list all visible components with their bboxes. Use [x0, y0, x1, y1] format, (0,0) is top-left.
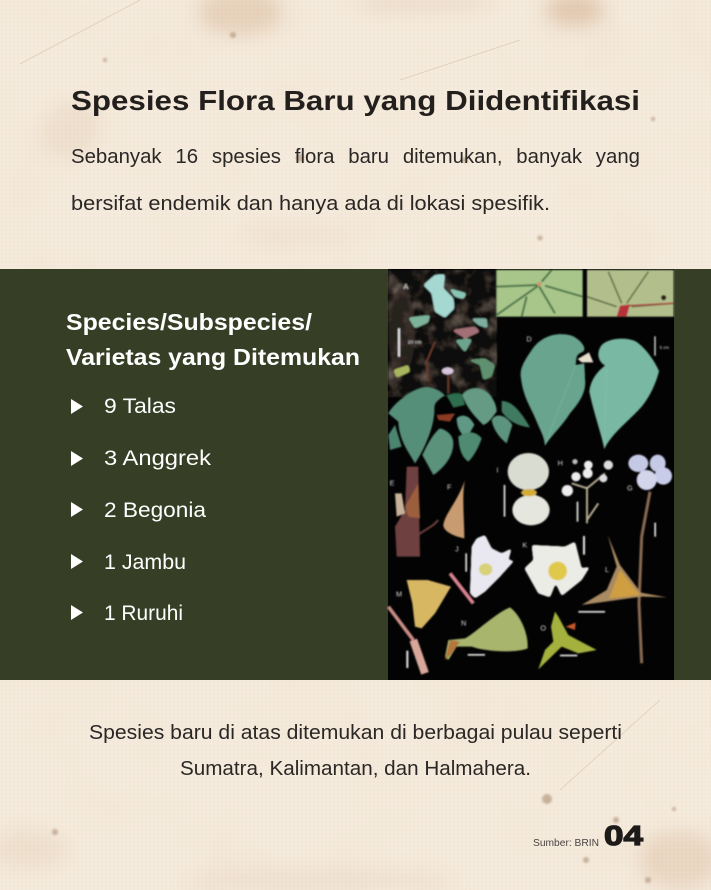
buds H: [562, 459, 613, 523]
list item: Talas: [71, 395, 176, 418]
label letters: G: [627, 484, 633, 493]
label letters: L: [605, 565, 609, 574]
label letters: O: [540, 624, 546, 633]
inflorescence G: [628, 455, 672, 663]
closing note: [89, 722, 622, 780]
fruit N: [445, 607, 528, 660]
title: Spesies Flora Baru yang Diidentifikasi: [71, 85, 640, 116]
source credit: Sumber: BRIN: [533, 837, 599, 849]
label letters: H: [558, 459, 563, 468]
flower J: [450, 535, 514, 603]
list item: Ruruhi: 1 Ruruhi: [104, 602, 183, 625]
list item: Anggrek: 3 Anggrek: [104, 447, 212, 470]
specimen photo plate: [388, 269, 674, 680]
intro paragraph: bersifat endemik dan hanya ada di lokasi spesifik.: [71, 193, 550, 215]
panel heading: [66, 309, 360, 370]
stem E: [395, 467, 438, 557]
photo upper half: plant, leaf details and leaves: [388, 270, 674, 475]
leaf detail B: [497, 270, 583, 317]
photo lower half: flowers and fruits: [388, 453, 672, 673]
white flower I: [504, 453, 550, 525]
label letters: I: [496, 465, 498, 474]
label letters: [390, 478, 633, 633]
intro paragraph: Sebanyak 16 spesies flora baru ditemukan, banyak yang: [71, 146, 640, 168]
list item: Jambu: 1 Jambu: [104, 551, 186, 574]
label letters: A: [403, 282, 408, 291]
panel: green species list: [0, 269, 711, 680]
panel heading: Species/Subspecies/: [66, 309, 313, 335]
list item: Anggrek: [71, 447, 212, 470]
intro paragraph: [71, 146, 640, 215]
list item: Begonia: 2 Begonia: [104, 499, 206, 522]
label letters: M: [396, 590, 402, 599]
bract F: [443, 480, 465, 538]
label letters: K: [522, 540, 527, 549]
list item: Talas: 9 Talas: [104, 395, 176, 418]
leaf detail C: [587, 270, 674, 317]
closing note: Spesies baru di atas ditemukan di berbagai pulau seperti: [89, 722, 622, 744]
label letters: J: [455, 544, 459, 553]
label letters: 10 cm: [408, 340, 421, 346]
fruit O: [538, 612, 597, 669]
habit photo A: [388, 270, 530, 475]
label letters: [403, 282, 669, 474]
label letters: 5 cm: [660, 345, 669, 350]
species list: [71, 395, 212, 625]
closing note: Sumatra, Kalimantan, dan Halmahera.: [180, 758, 531, 780]
label letters: D: [526, 335, 532, 344]
label letters: N: [461, 618, 466, 627]
label letters: E: [390, 478, 395, 487]
panel heading: Varietas yang Ditemukan: [66, 344, 360, 370]
flower K: [524, 536, 590, 597]
fruit M: [388, 580, 451, 673]
label letters: F: [447, 482, 452, 491]
page number: 04: [604, 820, 644, 851]
fruit L: [578, 535, 667, 613]
leaves D: [398, 328, 659, 449]
list item: Begonia: [71, 499, 206, 522]
